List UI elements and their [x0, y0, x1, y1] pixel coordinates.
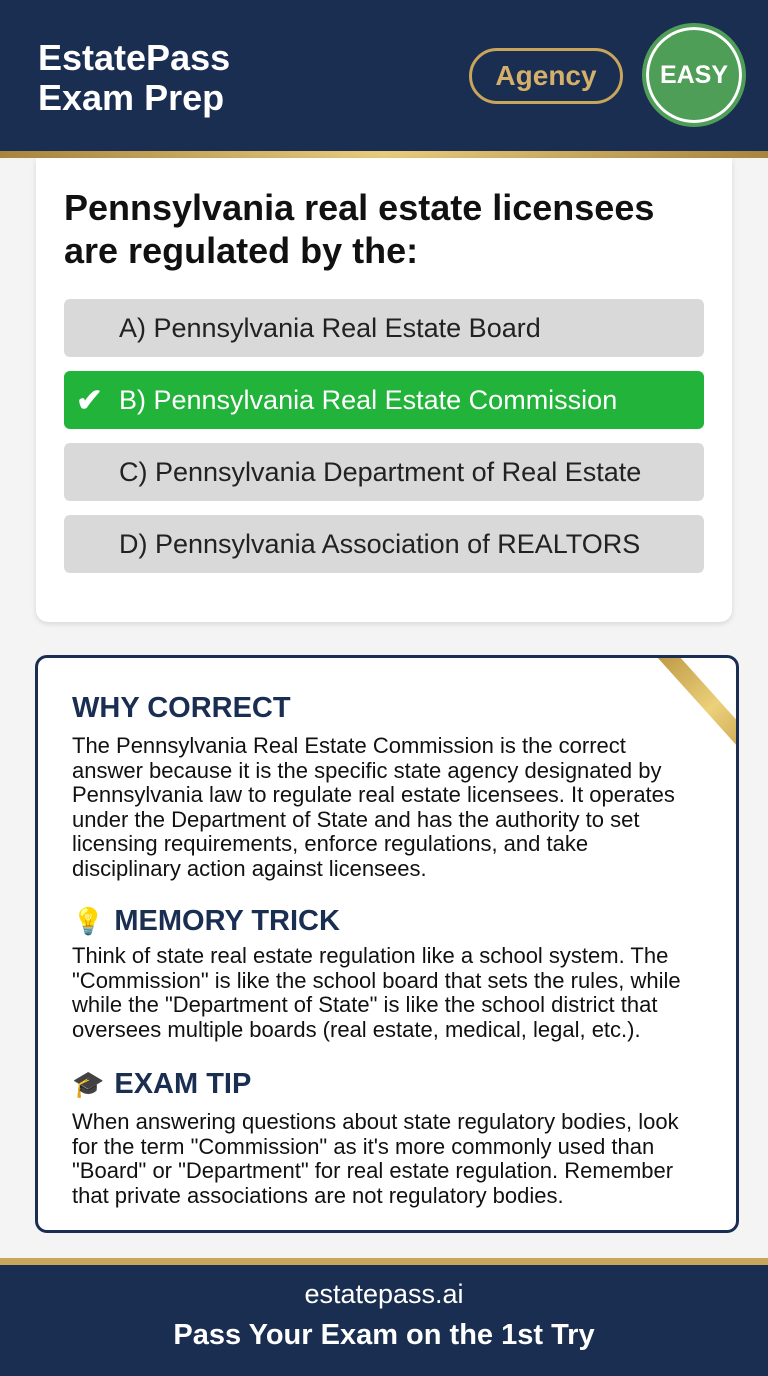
text: exam tip: for the term "Commission" as it's more commonly used than	[72, 1134, 654, 1159]
text: memory trick: oversees multiple boards (real estate, medical, legal, etc.).	[72, 1017, 641, 1042]
brand title: Exam Prep	[38, 77, 224, 118]
question text: are regulated by the:	[64, 230, 418, 271]
badge: agency: Agency	[495, 60, 597, 91]
badge: easy	[642, 23, 746, 127]
text: why correct	[72, 733, 675, 881]
text: memory trick	[72, 943, 681, 1042]
question card	[36, 158, 732, 622]
text: why correct: answer because it is the specific state agency designated by	[72, 758, 661, 783]
badge: agency	[469, 48, 623, 104]
text: memory trick: "Commission" is like the school board that sets the rules, while	[72, 968, 681, 993]
brand title: EstatePass	[38, 37, 230, 78]
text: why correct: The Pennsylvania Real Estate Commission is the correct	[72, 733, 626, 758]
badge: easy: EASY	[660, 61, 728, 89]
question text: Pennsylvania real estate licensees	[64, 187, 654, 228]
option C	[64, 443, 704, 501]
text: memory trick: while the "Department of State" is like the school district that	[72, 992, 657, 1017]
option C: C) Pennsylvania Department of Real Estate	[119, 457, 641, 487]
question text	[64, 187, 654, 271]
text: why correct: Pennsylvania law to regulate real estate licensees. It operates	[72, 782, 675, 807]
option D: D) Pennsylvania Association of REALTORS	[119, 529, 640, 559]
text: why correct: disciplinary action against licensees.	[72, 856, 427, 881]
heading: memory trick: 💡 MEMORY TRICK	[72, 905, 340, 937]
heading: why correct: WHY CORRECT	[72, 692, 291, 724]
option B correct: ✔	[76, 382, 103, 418]
explanation panel	[35, 655, 739, 1233]
footer tagline: Pass Your Exam on the 1st Try	[173, 1319, 595, 1351]
option B correct	[64, 371, 704, 429]
option B correct: B) Pennsylvania Real Estate Commission	[119, 385, 617, 415]
brand title	[38, 37, 230, 118]
text: exam tip: When answering questions about state regulatory bodies, look	[72, 1109, 679, 1134]
option D	[64, 515, 704, 573]
option A: A) Pennsylvania Real Estate Board	[119, 313, 541, 343]
text: memory trick: Think of state real estate regulation like a school system. The	[72, 943, 668, 968]
text: why correct: under the Department of State and has the authority to set	[72, 807, 639, 832]
footer url: estatepass.ai	[304, 1279, 464, 1309]
header	[0, 0, 768, 151]
option A	[64, 299, 704, 357]
text: exam tip: "Board" or "Department" for real estate regulation. Remember	[72, 1158, 673, 1183]
text: why correct: licensing requirements, enforce regulations, and take	[72, 831, 588, 856]
text: exam tip	[72, 1109, 679, 1208]
footer	[0, 1258, 768, 1376]
heading: exam tip: 🎓 EXAM TIP	[72, 1068, 251, 1100]
text: exam tip: that private associations are not regulatory bodies.	[72, 1183, 564, 1208]
